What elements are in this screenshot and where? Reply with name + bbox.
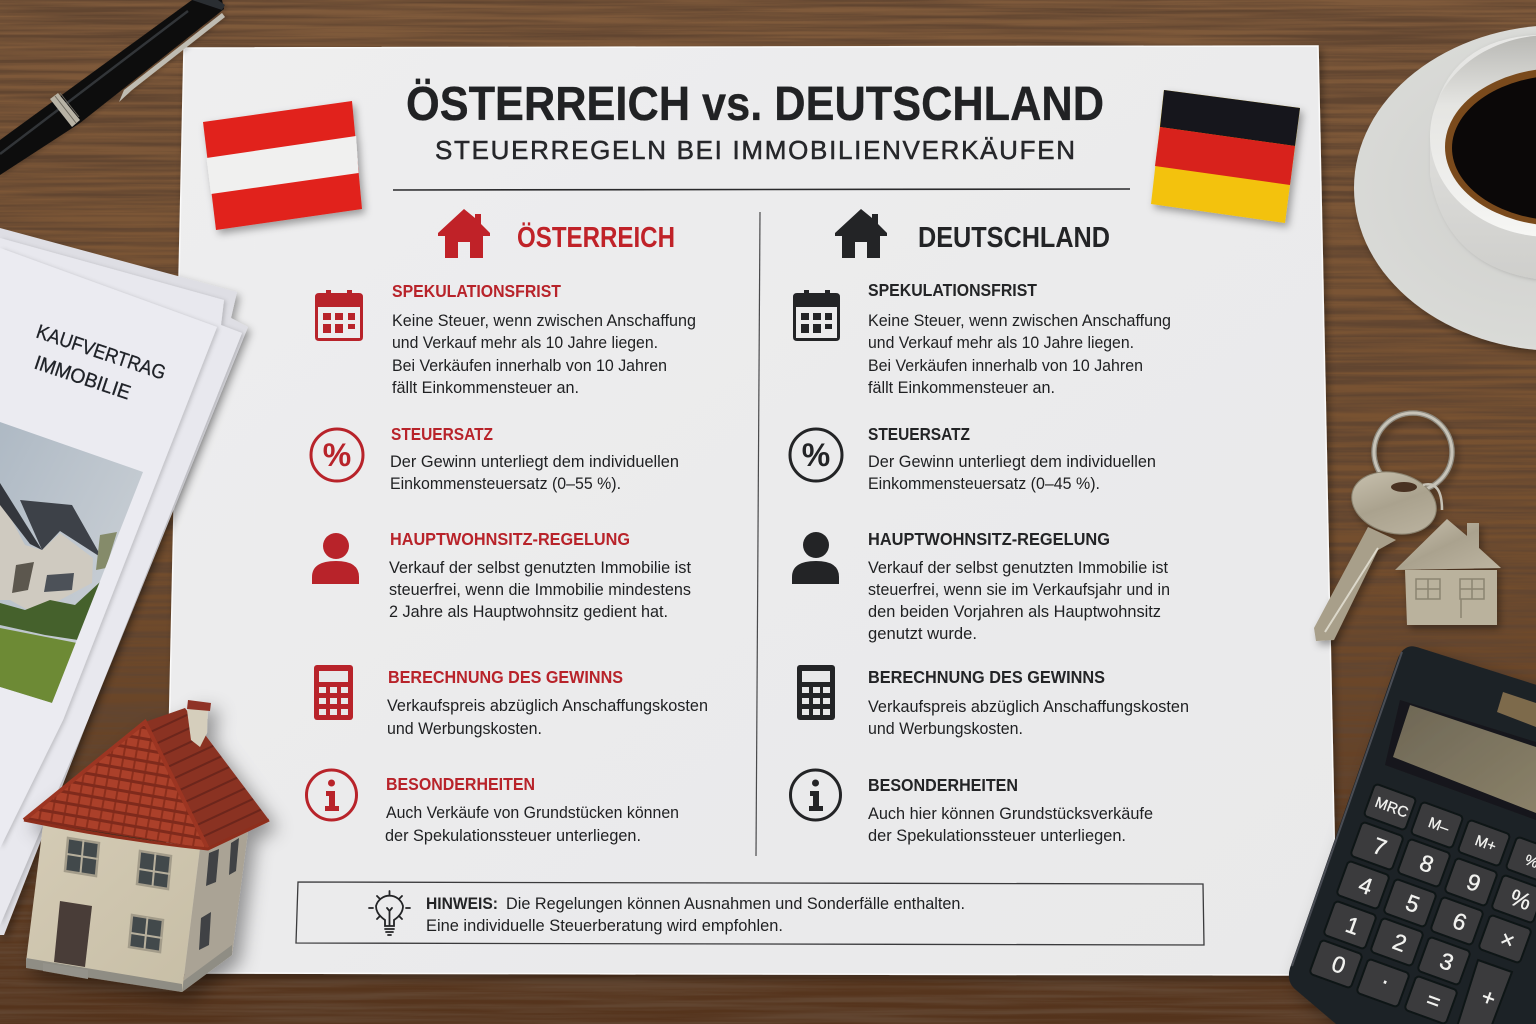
icon: person: [792, 532, 839, 584]
Besonderheiten: BESONDERHEITEN: [868, 775, 1018, 795]
calculator keys: 7: [1369, 832, 1390, 861]
calculator keys: ×: [1497, 925, 1518, 954]
icon: calculator: [314, 665, 353, 720]
coffee cup and saucer: [1354, 25, 1536, 351]
icon: calculator: [797, 665, 835, 720]
icon: percent: %: [323, 437, 351, 473]
note text: Eine individuelle Steuerberatung wird empfohlen.: [426, 917, 783, 935]
Hauptwohnsitz-Regelung: genutzt wurde.: [868, 625, 977, 643]
Steuersatz: Einkommensteuersatz (0–55 %).: [390, 475, 621, 493]
Spekulationsfrist: Keine Steuer, wenn zwischen Anschaffung: [868, 312, 1171, 330]
Spekulationsfrist: Bei Verkäufen innerhalb von 10 Jahren: [392, 357, 667, 375]
calculator keys: M+: [1473, 832, 1499, 855]
icon: info: [306, 770, 356, 820]
note text: HINWEIS:: [426, 895, 498, 913]
Steuersatz: Einkommensteuersatz (0–45 %).: [868, 475, 1100, 493]
Hauptwohnsitz-Regelung: HAUPTWOHNSITZ-REGELUNG: [390, 529, 630, 549]
calculator keys: 5: [1402, 889, 1423, 918]
flag: Germany: [1151, 90, 1300, 223]
calculator keys: ·: [1378, 967, 1394, 994]
icon: calendar: [315, 290, 363, 341]
flag: Austria: [203, 101, 362, 230]
Spekulationsfrist: [392, 281, 696, 397]
Besonderheiten: Auch Verkäufe von Grundstücken können: [386, 804, 679, 822]
calculator keys: %: [1507, 884, 1535, 915]
document house photo: [0, 420, 150, 710]
Spekulationsfrist: SPEKULATIONSFRIST: [392, 281, 561, 301]
Spekulationsfrist: fällt Einkommensteuer an.: [868, 379, 1055, 397]
calculator keys: M–: [1426, 814, 1452, 838]
document title text: IMMOBILIE: [31, 352, 133, 404]
panel: Deutschland: [790, 209, 1189, 845]
Hauptwohnsitz-Regelung: Verkauf der selbst genutzten Immobilie ist: [868, 559, 1168, 577]
Spekulationsfrist: SPEKULATIONSFRIST: [868, 280, 1037, 300]
calculator keys: 6: [1449, 907, 1470, 936]
icon: house red: [438, 209, 490, 258]
Spekulationsfrist: fällt Einkommensteuer an.: [392, 379, 579, 397]
calculator keys: 8: [1416, 849, 1437, 878]
roof right slope: [145, 708, 269, 849]
Hauptwohnsitz-Regelung: 2 Jahre als Hauptwohnsitz gedient hat.: [389, 603, 668, 621]
Hauptwohnsitz-Regelung: HAUPTWOHNSITZ-REGELUNG: [868, 529, 1110, 549]
calculator keys: [1309, 784, 1536, 1024]
Berechnung des Gewinns: BERECHNUNG DES GEWINNS: [868, 667, 1105, 687]
subtitle: STEUERREGELN BEI IMMOBILIENVERKÄUFEN: [435, 135, 1075, 165]
Berechnung des Gewinns: Verkaufspreis abzüglich Anschaffungskosten: [868, 698, 1189, 716]
calculator keys: 2: [1389, 928, 1410, 957]
title: ÖSTERREICH vs. DEUTSCHLAND: [406, 78, 1104, 131]
heading: Österreich: ÖSTERREICH: [517, 221, 675, 254]
Hauptwohnsitz-Regelung: steuerfrei, wenn die Immobilie mindestens: [389, 581, 691, 599]
Steuersatz: Der Gewinn unterliegt dem individuellen: [868, 453, 1156, 471]
Spekulationsfrist: und Verkauf mehr als 10 Jahre liegen.: [392, 334, 658, 352]
Berechnung des Gewinns: [387, 667, 708, 738]
Hauptwohnsitz-Regelung: [389, 529, 691, 621]
Hauptwohnsitz-Regelung: Verkauf der selbst genutzten Immobilie ist: [389, 559, 691, 577]
door: [54, 901, 92, 967]
icon: person: [312, 533, 359, 584]
calculator keys: MRC: [1373, 794, 1411, 822]
Spekulationsfrist: Bei Verkäufen innerhalb von 10 Jahren: [868, 357, 1143, 375]
Besonderheiten: Auch hier können Grundstücksverkäufe: [868, 805, 1153, 823]
icon: percent: %: [802, 437, 830, 473]
icon: house black: [835, 209, 887, 258]
heading: Deutschland: DEUTSCHLAND: [918, 222, 1110, 254]
icon: percent: [790, 429, 842, 481]
paper sheet: [164, 46, 1337, 975]
Spekulationsfrist: Keine Steuer, wenn zwischen Anschaffung: [392, 312, 696, 330]
windows: [65, 838, 239, 952]
chimney: [187, 705, 208, 747]
calculator keys: 0: [1328, 950, 1349, 979]
side wall: [182, 832, 248, 992]
keys with house keychain: [1314, 413, 1501, 641]
Besonderheiten: der Spekulationssteuer unterliegen.: [385, 827, 641, 845]
calculator keys: 9: [1463, 868, 1484, 897]
document title text: KAUFVERTRAG: [33, 321, 168, 385]
Steuersatz: STEUERSATZ: [868, 424, 970, 444]
Hauptwohnsitz-Regelung: [868, 529, 1170, 643]
Berechnung des Gewinns: und Werbungskosten.: [387, 720, 542, 738]
calculator keys: 1: [1342, 911, 1363, 940]
Berechnung des Gewinns: [868, 667, 1189, 738]
calculator keys: =: [1423, 986, 1444, 1015]
Berechnung des Gewinns: Verkaufspreis abzüglich Anschaffungskosten: [387, 697, 708, 715]
icon: light bulb: [369, 891, 410, 935]
Besonderheiten: [868, 775, 1153, 845]
house keychain charm: [1395, 519, 1501, 625]
panel: Österreich: [306, 209, 708, 845]
Besonderheiten: [385, 774, 679, 845]
Steuersatz: [390, 424, 679, 493]
icon: calendar: [793, 290, 840, 341]
icon: percent: [311, 429, 363, 481]
Besonderheiten: BESONDERHEITEN: [386, 774, 535, 794]
pen: [0, 0, 225, 175]
Spekulationsfrist: und Verkauf mehr als 10 Jahre liegen.: [868, 334, 1134, 352]
Steuersatz: Der Gewinn unterliegt dem individuellen: [390, 453, 679, 471]
Hauptwohnsitz-Regelung: den beiden Vorjahren als Hauptwohnsitz: [868, 603, 1161, 621]
Spekulationsfrist: [868, 280, 1171, 397]
miniature house: [24, 700, 269, 992]
icon: info: [790, 770, 840, 820]
roof left slope: [24, 722, 208, 849]
document stack: Kaufvertrag Immobilie: [0, 228, 248, 935]
callout: Hinweis: [296, 882, 1204, 945]
note text: Die Regelungen können Ausnahmen und Sonderfälle enthalten.: [506, 895, 965, 913]
calculator keys: 3: [1436, 947, 1457, 976]
Hauptwohnsitz-Regelung: steuerfrei, wenn sie im Verkaufsjahr und in: [868, 581, 1170, 599]
note text: [426, 895, 965, 935]
Steuersatz: STEUERSATZ: [391, 424, 493, 444]
Besonderheiten: der Spekulationssteuer unterliegen.: [868, 827, 1126, 845]
calculator: [1289, 646, 1536, 1024]
calculator keys: +: [1478, 983, 1499, 1012]
front wall: [26, 825, 200, 992]
key: [1314, 463, 1443, 641]
Berechnung des Gewinns: und Werbungskosten.: [868, 720, 1023, 738]
calculator keys: 4: [1355, 871, 1376, 900]
Steuersatz: [868, 424, 1156, 493]
Berechnung des Gewinns: BERECHNUNG DES GEWINNS: [388, 667, 623, 687]
